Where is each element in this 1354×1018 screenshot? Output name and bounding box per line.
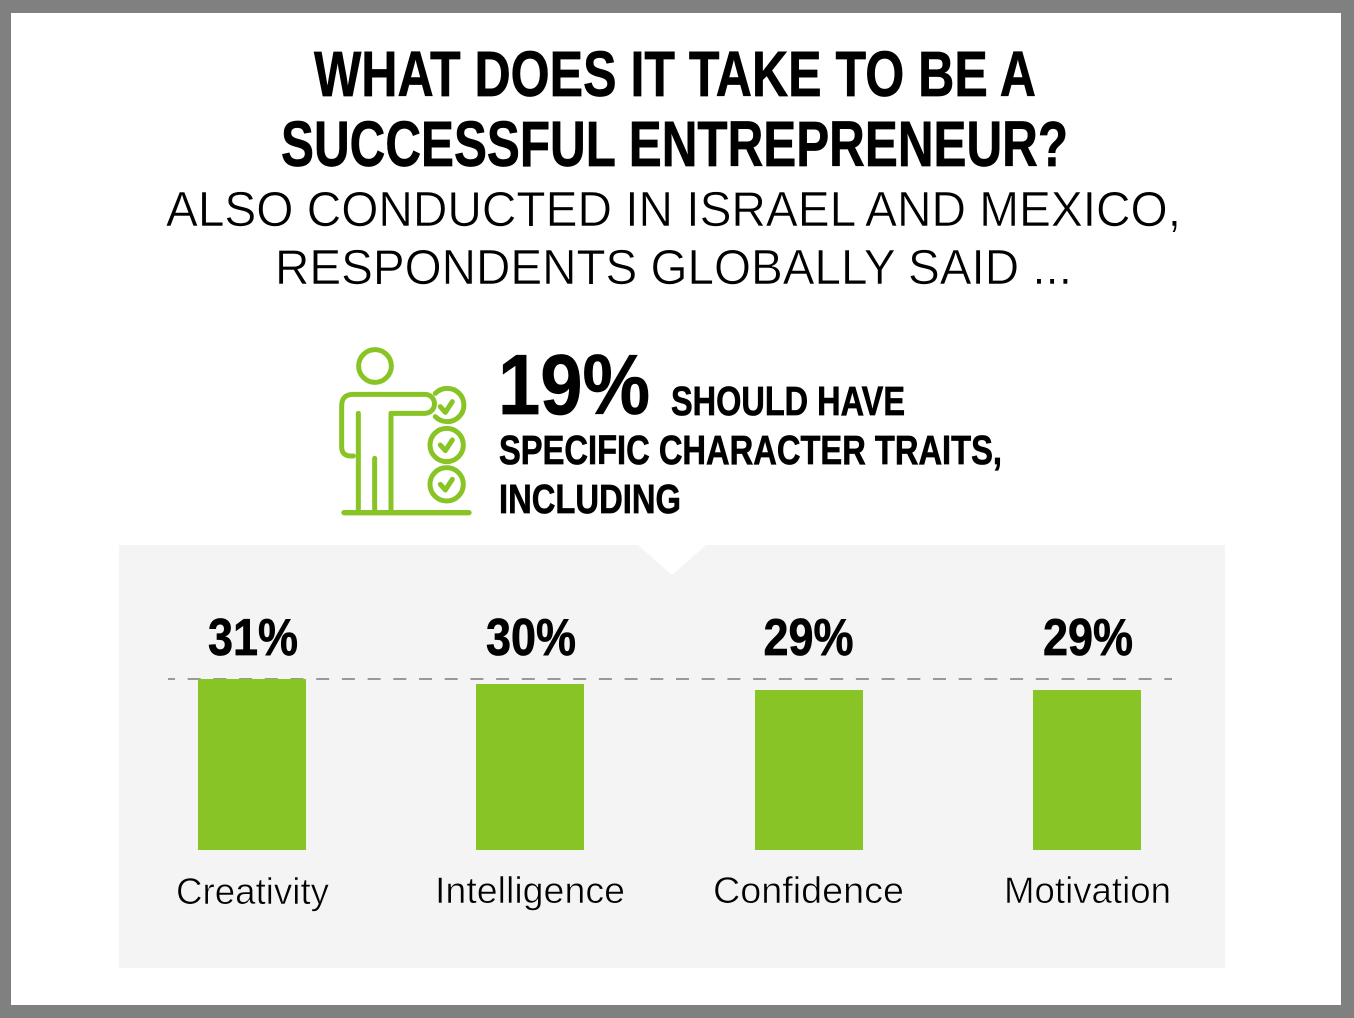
key statistic: 19% xyxy=(498,338,1002,522)
bar: Intelligence 30%: 30% xyxy=(486,609,576,667)
bar: Confidence 29%: Confidence xyxy=(713,870,904,911)
key statistic: 19%: 19% xyxy=(498,338,650,433)
title: WHAT DOES IT TAKE TO BE A xyxy=(314,38,1036,110)
bar: Creativity 31% xyxy=(176,609,329,912)
subtitle: RESPONDENTS GLOBALLY SAID ... xyxy=(275,241,1072,295)
bar: Intelligence 30% xyxy=(435,609,625,911)
bar: Intelligence 30%: Intelligence xyxy=(435,870,625,911)
panel: bar chart background with notch xyxy=(119,545,1225,968)
bar: Motivation 29% xyxy=(1004,609,1171,911)
bar chart xyxy=(168,609,1172,912)
bar: Motivation 29%: Motivation xyxy=(1004,870,1171,911)
bar: Confidence 29%: 29% xyxy=(764,609,854,667)
bar: Creativity 31%: 31% xyxy=(208,609,298,667)
reference dashed line xyxy=(168,678,1172,680)
bar: Confidence 29% xyxy=(713,609,904,911)
key statistic: 19%: INCLUDING xyxy=(499,476,681,522)
subtitle: ALSO CONDUCTED IN ISRAEL AND MEXICO, xyxy=(166,183,1181,237)
title: SUCCESSFUL ENTREPRENEUR? xyxy=(281,108,1068,180)
subtitle xyxy=(166,183,1181,295)
icon: person with checklist xyxy=(342,350,469,513)
key statistic: 19%: SHOULD HAVE xyxy=(671,378,905,424)
bar: Motivation 29%: 29% xyxy=(1043,609,1133,667)
title xyxy=(281,38,1068,180)
bar: Creativity 31%: Creativity xyxy=(176,871,329,912)
key statistic: 19%: SPECIFIC CHARACTER TRAITS, xyxy=(499,427,1002,473)
